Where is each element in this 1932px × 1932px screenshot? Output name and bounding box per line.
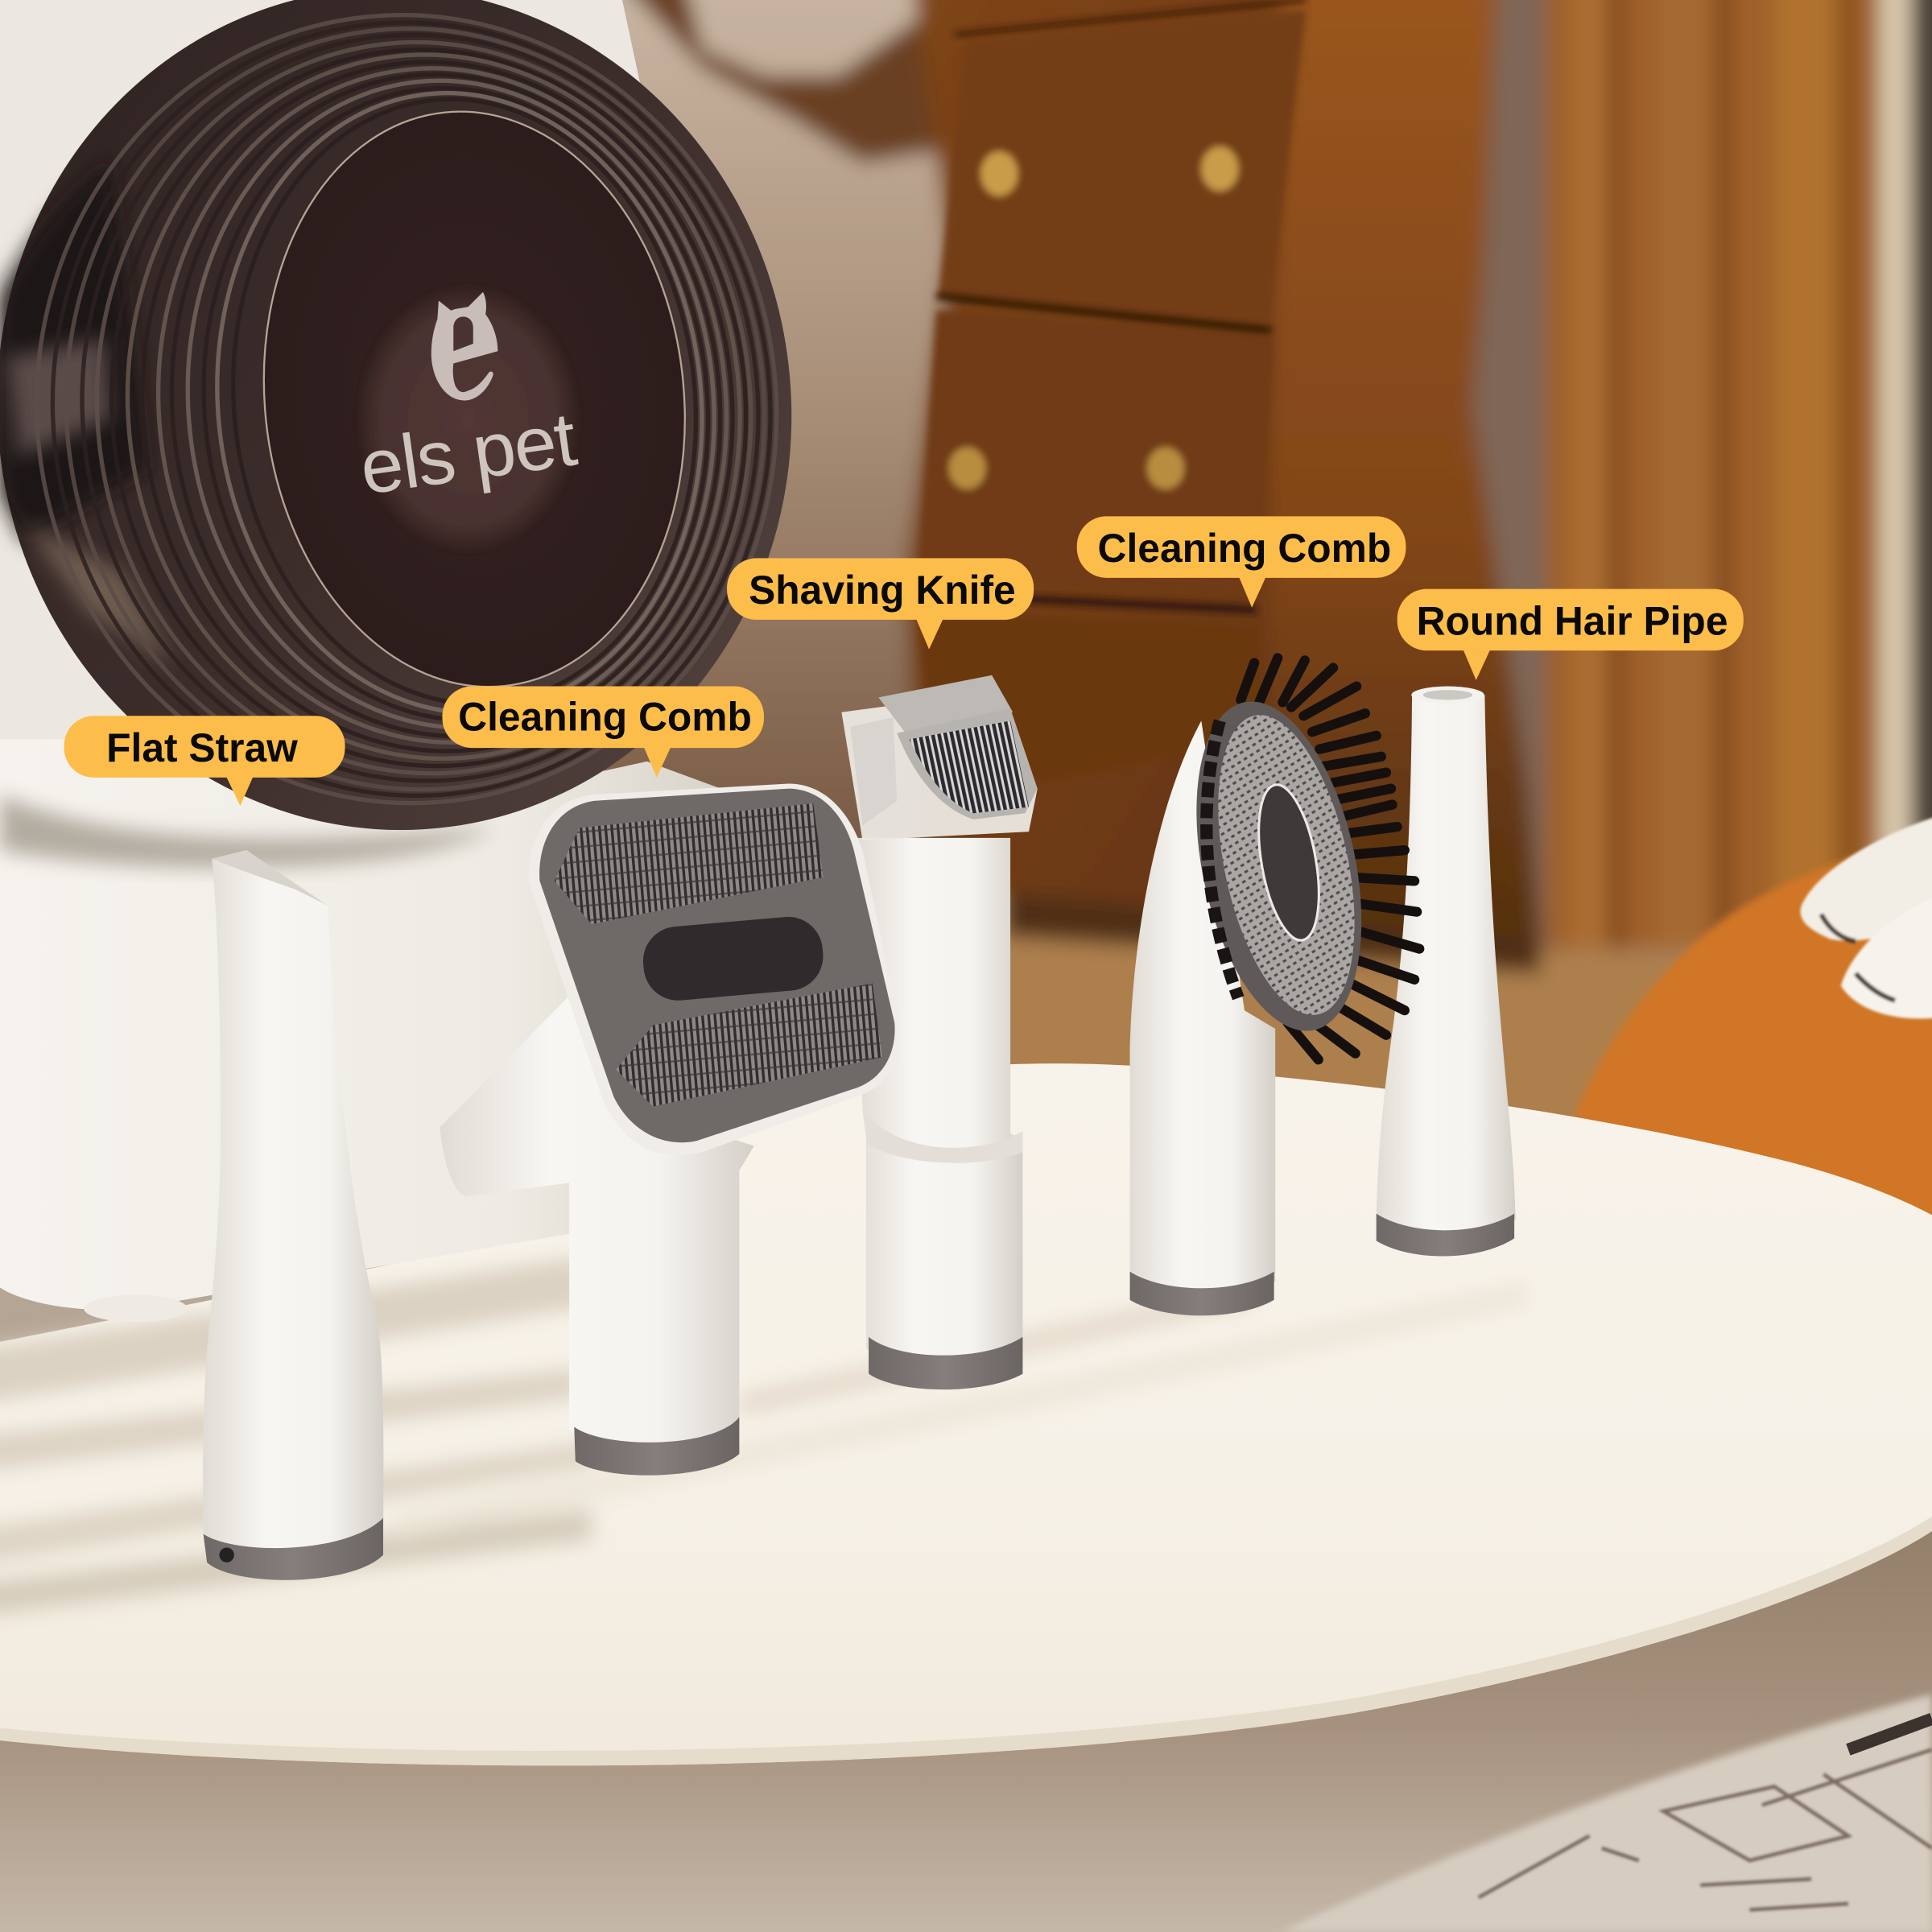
logo backing circle [360,288,576,550]
label: shaving knife: Shaving Knife [749,568,1016,613]
label: flat straw [64,716,345,806]
cabinet drawers and knobs [918,0,1306,801]
dryer dark disc [0,0,846,881]
round table [0,1063,1932,1765]
brush slot [1249,780,1329,945]
tool: cleaning comb 1 [440,783,900,1476]
label: flat straw: Flat Straw [106,725,298,770]
label: shaving knife [727,558,1034,650]
brush mesh pad [1195,703,1378,1027]
floor rug under table [0,1479,1932,1932]
tool: flat straw [203,850,383,1580]
wordmark: els pet [355,396,581,511]
dryer machine white body [0,0,720,1322]
label: cleaning comb right: Cleaning Comb [1098,526,1391,571]
logo: els pet [355,292,581,511]
dog paw [1801,813,1932,1018]
comb pins [555,803,823,924]
brush bristles [1241,658,1419,1059]
label: cleaning comb left: Cleaning Comb [458,695,752,740]
label: cleaning comb right [1077,516,1406,608]
dryer inner plate [236,91,713,708]
label: round hair pipe [1397,589,1744,680]
blurred room background [602,0,1932,1117]
label: round hair pipe: Round Hair Pipe [1417,598,1728,643]
tool: round hair pipe [1377,687,1516,1256]
label: cleaning comb left [442,687,764,778]
comb slot [640,914,826,1003]
icon: cat e [431,292,497,400]
tool: cleaning comb 2 [1130,658,1419,1315]
orange cushion [1575,832,1932,1232]
tool: shaving knife [841,675,1038,1389]
disc concentric rings [0,0,815,840]
